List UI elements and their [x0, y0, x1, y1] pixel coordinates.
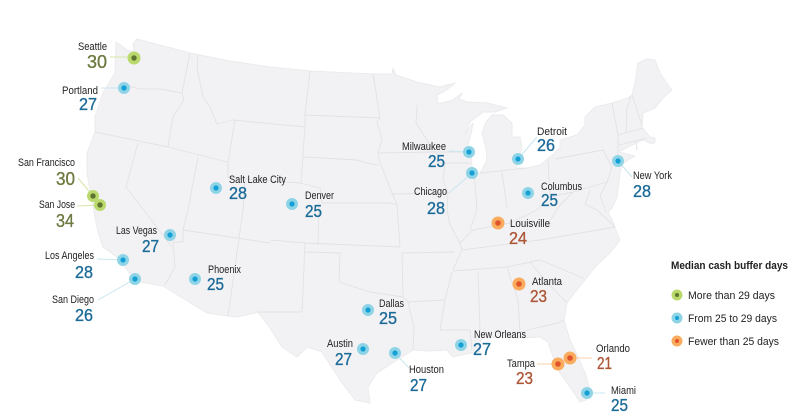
city: Louisville — [492, 216, 550, 248]
map: United States outline — [87, 39, 672, 403]
city: Austin: 27 — [335, 349, 352, 369]
city: San Francisco — [18, 157, 99, 202]
city: New York: New York — [633, 170, 672, 182]
city: San Diego: 26 — [75, 305, 93, 325]
city: Detroit — [512, 126, 567, 165]
city: Houston — [389, 347, 444, 395]
city: Phoenix — [189, 264, 241, 294]
city: Milwaukee — [402, 141, 475, 171]
city: Houston: 27 — [410, 375, 427, 395]
legend item: more than 29 days: More than 29 days — [688, 290, 775, 302]
city: New Orleans — [455, 329, 526, 359]
city: San Jose: San Jose — [39, 199, 75, 211]
city: Tampa — [507, 358, 564, 388]
city: Orlando — [564, 343, 630, 373]
city: Austin — [327, 338, 369, 369]
city: Austin: Austin — [327, 338, 353, 350]
city: New Orleans: New Orleans — [474, 329, 526, 341]
city: Seattle: 30 — [87, 51, 107, 72]
city: Las Vegas: Las Vegas — [116, 225, 157, 237]
city: Portland: Portland — [62, 85, 98, 97]
city: New Orleans: 27 — [473, 339, 491, 359]
city: San Jose — [39, 199, 106, 231]
legend title: Median cash buffer days — [671, 260, 788, 272]
city: Salt Lake City: Salt Lake City — [229, 174, 286, 186]
legend item: from 25 to 29 days: From 25 to 29 days — [688, 313, 777, 325]
city: San Jose: 34 — [56, 210, 74, 231]
city: Seattle — [78, 41, 140, 72]
city: Phoenix: 25 — [207, 274, 224, 294]
city: Tampa: 23 — [516, 368, 533, 388]
city: Louisville: 24 — [509, 228, 527, 248]
city: Denver: Denver — [305, 190, 334, 202]
city: Seattle: Seattle — [78, 41, 107, 53]
city: Portland — [62, 82, 130, 114]
city: Milwaukee: 25 — [428, 151, 445, 171]
city: Detroit: Detroit — [537, 126, 567, 138]
city: Los Angeles — [45, 250, 129, 282]
city: San Diego: San Diego — [52, 294, 94, 306]
city: Atlanta — [512, 276, 563, 306]
city: Chicago: Chicago — [414, 186, 447, 198]
city: Denver — [286, 190, 334, 221]
city: Miami: Miami — [611, 385, 636, 397]
city: New York — [612, 155, 672, 201]
city: Chicago — [414, 167, 478, 218]
city: San Francisco: 30 — [56, 168, 75, 189]
city: San Diego — [52, 273, 141, 325]
city: Houston: Houston — [409, 364, 444, 376]
legend — [671, 260, 788, 348]
city: San Francisco: San Francisco — [18, 157, 75, 169]
city: Orlando: 21 — [597, 353, 612, 373]
city: Chicago: 28 — [427, 198, 445, 218]
legend item: fewer than 25 days: Fewer than 25 days — [688, 336, 779, 348]
city: Los Angeles: Los Angeles — [45, 250, 94, 262]
city: Las Vegas: 27 — [142, 236, 159, 256]
city: Las Vegas — [116, 225, 176, 256]
city: Dallas: Dallas — [379, 298, 404, 310]
city: Miami — [581, 385, 636, 415]
city: Detroit: 26 — [537, 135, 555, 155]
city: Denver: 25 — [305, 201, 322, 221]
city: Tampa: Tampa — [507, 358, 536, 370]
city: New York: 28 — [633, 181, 651, 201]
city: Columbus: Columbus — [541, 181, 582, 193]
city: Phoenix: Phoenix — [208, 264, 241, 276]
city: Salt Lake City: 28 — [229, 183, 247, 203]
city: Miami: 25 — [611, 395, 628, 415]
city: Orlando: Orlando — [596, 343, 630, 355]
city: Portland: 27 — [79, 94, 97, 114]
city: Atlanta: Atlanta — [532, 276, 563, 288]
city: Dallas: 25 — [379, 308, 397, 328]
city: Los Angeles: 28 — [75, 262, 93, 282]
city: Dallas — [362, 298, 404, 328]
city: Salt Lake City — [210, 174, 286, 203]
city: Columbus — [522, 181, 582, 210]
city: Louisville: Louisville — [510, 218, 550, 230]
city: Atlanta: 23 — [530, 286, 547, 306]
city: Milwaukee: Milwaukee — [402, 141, 446, 153]
city: Columbus: 25 — [541, 190, 558, 210]
